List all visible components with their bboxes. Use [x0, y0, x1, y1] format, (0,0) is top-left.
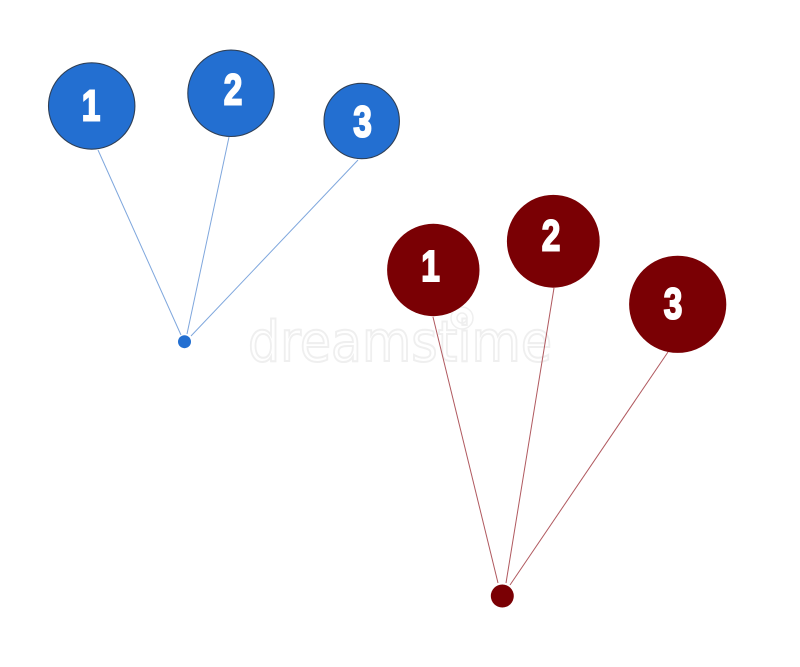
red balloon 3: 3 — [664, 280, 682, 329]
red strings — [433, 288, 668, 585]
blue balloon 1 — [48, 63, 135, 149]
blue balloon 2 — [188, 50, 274, 136]
red balloon 1 — [387, 224, 479, 316]
red balloon 3 — [629, 256, 726, 353]
red balloon group — [387, 195, 726, 608]
red balloon 1: 1 — [421, 243, 440, 291]
blue anchor dot — [178, 335, 191, 348]
blue balloon 3: 3 — [353, 98, 372, 147]
blue balloon 2: 2 — [224, 66, 242, 115]
watermark: dreamstime — [248, 310, 552, 375]
red anchor dot — [491, 584, 514, 608]
red balloon 2 — [507, 195, 600, 288]
red balloon 2: 2 — [542, 212, 560, 261]
blue balloon group — [48, 50, 399, 348]
blue strings — [98, 137, 358, 336]
blue balloon 1: 1 — [82, 82, 100, 131]
blue balloon 3 — [324, 83, 399, 159]
